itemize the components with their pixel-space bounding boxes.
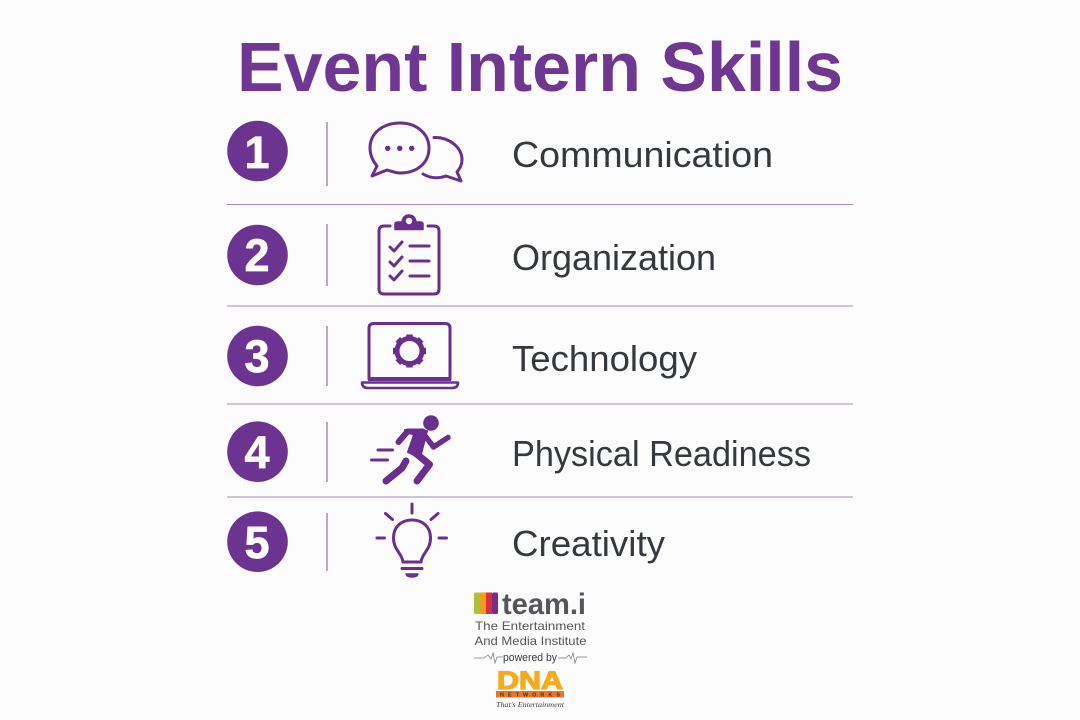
number badge 2 [227,225,288,285]
icon: laptop with gear [362,324,458,388]
icon: light bulb [377,504,446,577]
title: Event Intern Skills [237,28,843,106]
row 3: technology [227,324,697,388]
label: creativity: Creativity [512,523,665,564]
DNA logo: NETWORKS [500,692,560,698]
icon: speech bubbles [370,123,462,181]
number badge 5 [227,511,288,572]
number badge 2: 2 [244,230,270,281]
label: communication: Communication [512,134,773,175]
icon: runner [372,415,448,481]
number badge 3: 3 [244,331,270,382]
number badge 1: 1 [244,127,270,178]
label: physical readiness: Physical Readiness [512,433,811,474]
label: organization: Organization [512,237,716,278]
number badge 5: 5 [244,517,270,568]
row 4: physical readiness [227,415,811,482]
number badge 1 [227,121,288,181]
row 2: organization [227,215,716,294]
logo wordmark: team.i [502,588,586,621]
label: technology: Technology [512,338,697,379]
row 5: creativity [227,504,665,577]
row 1: communication [227,121,773,186]
number badge 4 [227,421,288,482]
logo: team.i and DNA: And Media Institute [474,634,587,648]
DNA logo: That's Entertainment [496,701,565,709]
number badge 3 [227,326,288,386]
DNA logo: DNA [497,667,563,695]
logo mark: colour stripes [474,592,498,614]
powered by: powered by [503,652,557,664]
icon: clipboard [379,215,439,294]
logo: team.i and DNA [474,588,587,709]
number badge 4: 4 [244,427,270,478]
DNA logo [496,667,565,709]
logo tagline: The Entertainment [475,619,586,633]
